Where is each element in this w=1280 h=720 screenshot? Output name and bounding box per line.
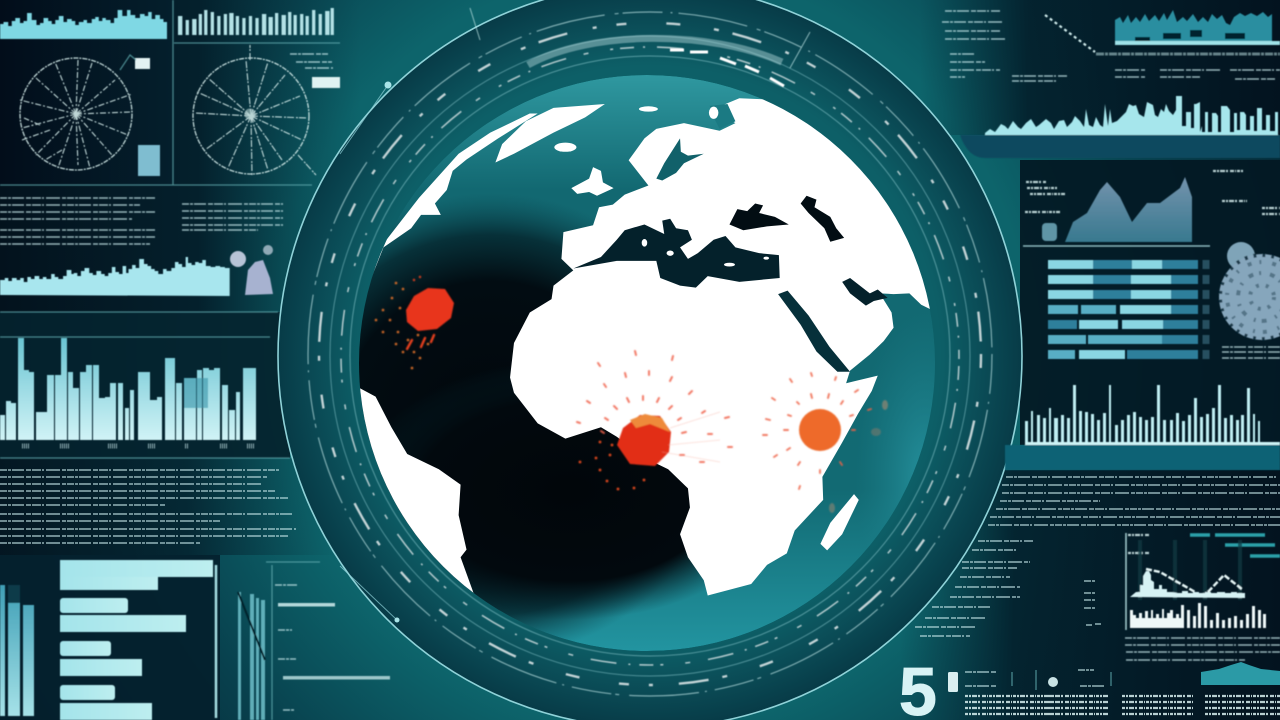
- panel: lower right chart: [1125, 533, 1280, 660]
- text block: lower right: [988, 477, 1280, 525]
- panel: top right charts: [942, 10, 1280, 158]
- Mediterranean Sea: [573, 219, 780, 288]
- blob cluster: [245, 260, 273, 295]
- vertical bars: [0, 585, 34, 716]
- panel: lower left charts: [0, 560, 390, 720]
- panel: right middle charts: [1023, 171, 1280, 359]
- panel: left top wheel charts: [0, 0, 340, 312]
- panel: dark right backdrop: [900, 0, 1280, 720]
- outbreak marker: West Africa: [577, 351, 732, 489]
- globe: [359, 75, 935, 651]
- area strip: [1115, 10, 1272, 45]
- ocean shading: [359, 75, 935, 651]
- globe thumbnail: [1227, 242, 1255, 270]
- area chart: [1065, 177, 1192, 242]
- text block: middle: [182, 204, 283, 230]
- bar strip: top left: [0, 10, 167, 39]
- data rings around the globe: [308, 8, 992, 696]
- axis labels: [22, 444, 254, 448]
- wheel chart 1: [20, 58, 132, 170]
- horizontal bars: [60, 560, 213, 720]
- landforms group: [356, 98, 973, 596]
- British Isles: [571, 167, 614, 196]
- bar strip: top middle: [178, 8, 334, 35]
- landmass: Eurasia and Africa: [510, 98, 973, 596]
- mountain mini chart: [1201, 662, 1280, 685]
- outbreak marker: Atlantic: [376, 277, 454, 368]
- bar chart: left main: [0, 337, 290, 458]
- Persian Gulf: [842, 278, 888, 306]
- text block: top right: [942, 11, 1280, 81]
- Caspian Sea: [801, 196, 844, 242]
- Red Sea: [778, 291, 850, 372]
- text block: chart caption: [1125, 638, 1280, 660]
- text block: lower left: [0, 470, 296, 543]
- North America: [372, 114, 538, 275]
- panel frame lines: [0, 0, 340, 185]
- arctic sea inlet: [710, 104, 735, 129]
- side mini chart: [266, 562, 320, 720]
- Black Sea: [729, 203, 789, 230]
- particle sphere: [1219, 254, 1280, 340]
- teal band: [1005, 445, 1280, 470]
- bar chart: right lower: [1005, 385, 1280, 470]
- stacked bars: [1048, 260, 1206, 359]
- dark band under strip: [960, 135, 1280, 158]
- bar strip: middle left: [0, 257, 230, 296]
- small labels and swatch: [135, 58, 150, 69]
- wheel chart 2: [193, 45, 316, 175]
- narrow bars: [238, 592, 265, 720]
- footer data grid: [948, 670, 1280, 714]
- Greenland: [495, 104, 605, 163]
- Iceland and arctic islands: [554, 106, 718, 152]
- text block: left: [0, 198, 155, 244]
- text block: centre bottom right: [915, 541, 1033, 636]
- lower bars: [1130, 603, 1266, 628]
- South America: [358, 387, 474, 596]
- curve bars: [1130, 571, 1245, 598]
- outer orbit ring: [278, 0, 1022, 720]
- bar strip: right top: [985, 96, 1278, 135]
- panel: dark left backdrop: [0, 0, 360, 720]
- Madagascar: [820, 494, 859, 550]
- area chart notes: [1025, 171, 1280, 214]
- outbreak marker: East Africa: [763, 373, 888, 513]
- Baltic Sea: [656, 138, 704, 180]
- Mediterranean islands: [642, 239, 769, 267]
